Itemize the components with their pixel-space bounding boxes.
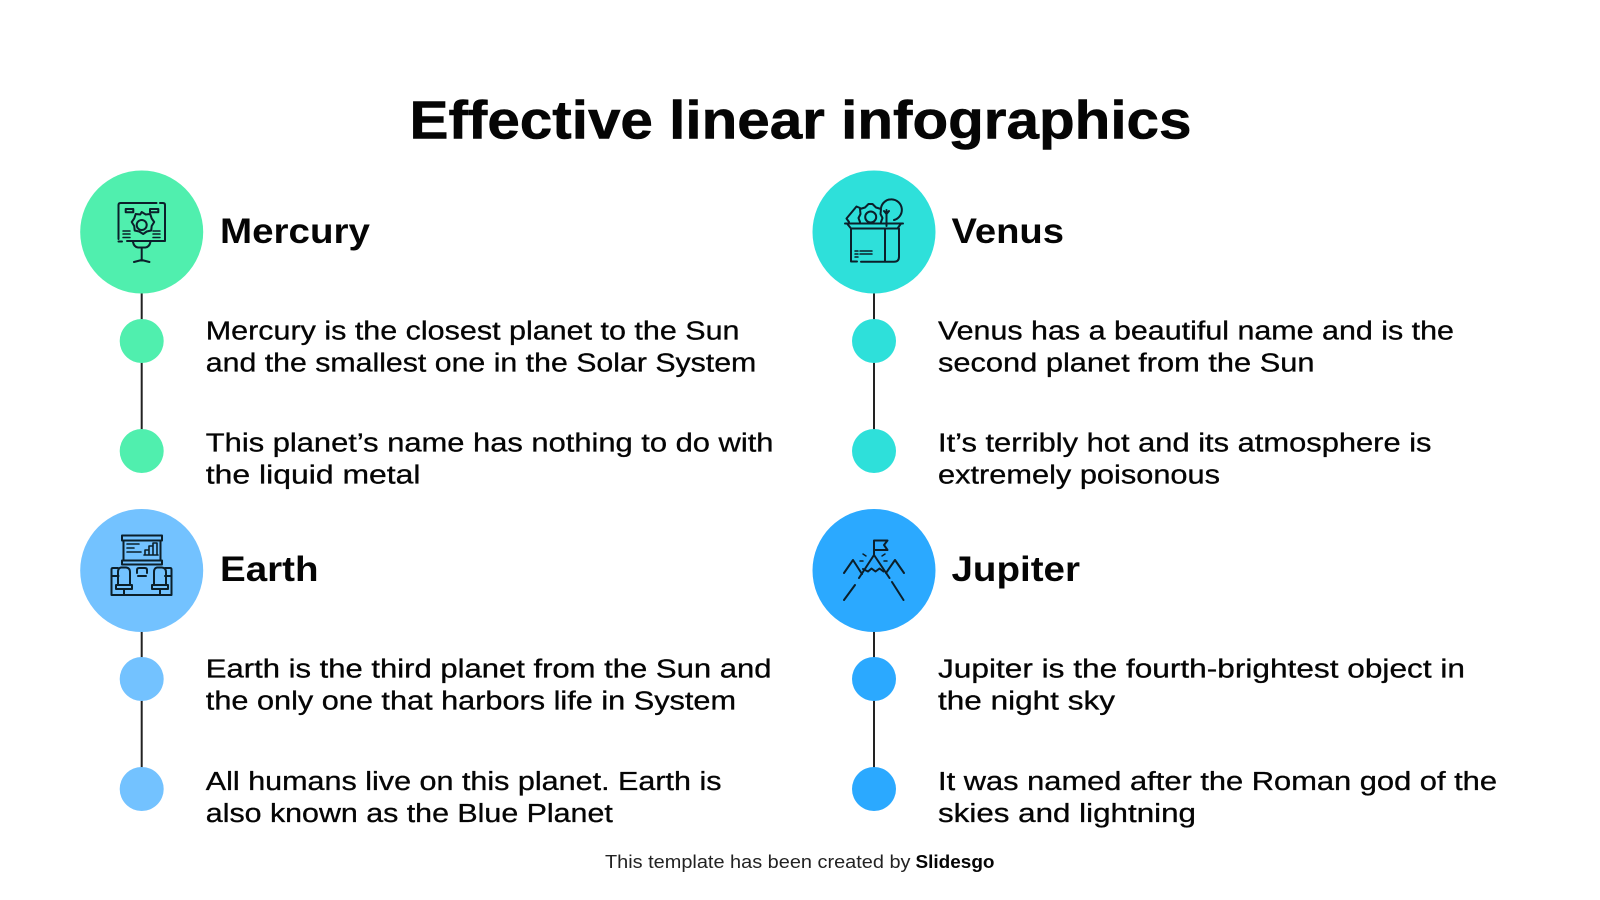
- timeline: Earth: [141, 570, 143, 789]
- heading: Earth: Earth: [220, 550, 318, 589]
- footer credit: This template has been created by: [605, 851, 911, 872]
- text block 1: and the smallest one in the Solar System: [206, 350, 756, 378]
- bullet dot 2: [120, 429, 164, 473]
- icon circle: Venus: [812, 170, 936, 294]
- text block 1: the night sky: [938, 688, 1115, 716]
- bullet dot 2: [852, 767, 896, 811]
- text block 1: [206, 317, 756, 378]
- icon circle: Earth: [80, 509, 203, 632]
- icon: box with gear and plant: [845, 199, 903, 262]
- footer credit: Slidesgo: [916, 851, 994, 872]
- text block 1: Earth is the third planet from the Sun and: [206, 656, 772, 684]
- timeline: Venus: [873, 232, 875, 451]
- heading: Mercury: Mercury: [220, 212, 371, 251]
- panel: Jupiter: [812, 509, 1497, 828]
- text block 1: Mercury is the closest planet to the Sun: [206, 317, 740, 345]
- title: Effective linear infographics: [410, 90, 1192, 150]
- text block 1: Venus has a beautiful name and is the: [938, 317, 1454, 345]
- text block 2: also known as the Blue Planet: [206, 800, 613, 828]
- text block 2: It’s terribly hot and its atmosphere is: [938, 429, 1432, 457]
- text block 2: the liquid metal: [206, 462, 420, 490]
- panel: Mercury: [80, 170, 773, 490]
- heading: Venus: Venus: [952, 212, 1064, 251]
- timeline: Jupiter: [873, 570, 875, 789]
- bullet dot 2: [120, 767, 164, 811]
- panel: Earth: [80, 509, 771, 828]
- icon circle: Mercury: [80, 170, 203, 294]
- text block 1: [938, 317, 1454, 378]
- icon: mountain with flag: [844, 540, 904, 600]
- text block 2: [206, 429, 774, 490]
- timeline: Mercury: [141, 232, 143, 451]
- icon circle: Jupiter: [812, 509, 936, 632]
- text block 1: the only one that harbors life in System: [206, 688, 736, 716]
- icon: presentation board with gear: [118, 203, 165, 262]
- text block 1: Jupiter is the fourth-brightest object in: [938, 656, 1465, 684]
- text block 2: [938, 768, 1497, 828]
- text block 2: It was named after the Roman god of the: [938, 768, 1497, 796]
- text block 2: extremely poisonous: [938, 462, 1220, 490]
- bullet dot 1: [852, 319, 896, 363]
- text block 2: This planet’s name has nothing to do with: [206, 429, 774, 457]
- text block 2: [206, 768, 722, 828]
- text block 2: skies and lightning: [938, 800, 1196, 828]
- heading: Jupiter: Jupiter: [952, 550, 1080, 589]
- panel: Venus: [812, 170, 1454, 490]
- text block 1: [206, 656, 772, 716]
- bullet dot 1: [852, 657, 896, 701]
- icon: meeting room with chart: [112, 536, 172, 595]
- text block 1: second planet from the Sun: [938, 350, 1314, 378]
- text block 1: [938, 656, 1465, 716]
- text block 2: All humans live on this planet. Earth is: [206, 768, 722, 796]
- bullet dot 1: [120, 657, 164, 701]
- text block 2: [938, 429, 1432, 490]
- bullet dot 1: [120, 319, 164, 363]
- bullet dot 2: [852, 429, 896, 473]
